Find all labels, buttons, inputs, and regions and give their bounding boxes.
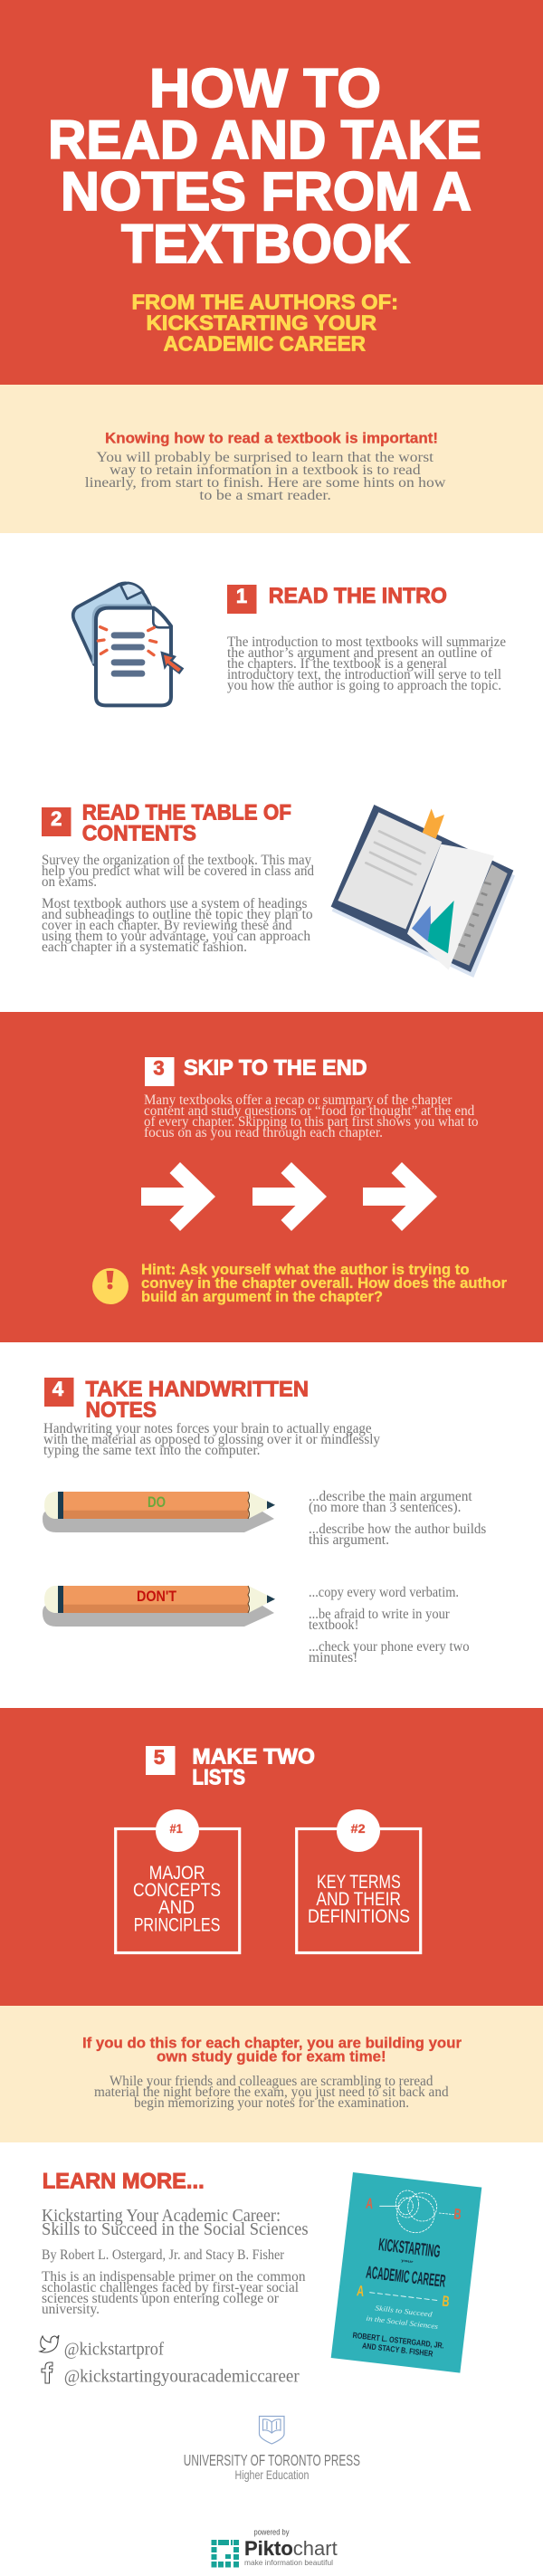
- arrow 1: [141, 1162, 215, 1231]
- text: don't list: ...check your phone every two: [309, 1639, 470, 1655]
- icon: shield with open book: [259, 2417, 284, 2444]
- card: list 2: [297, 1809, 421, 1953]
- arrow 3: [363, 1162, 437, 1231]
- book description: university.: [42, 2302, 100, 2317]
- heading: read the table of contents: CONTENTS: [82, 821, 196, 845]
- book cover: A: [356, 2282, 365, 2300]
- icon: don't pencil: [43, 1586, 275, 1627]
- icon: piktochart mark: [212, 2540, 239, 2567]
- book cover: your: [401, 2258, 414, 2264]
- intro text: way to retain information in a textbook is to read: [110, 463, 421, 478]
- title: READ AND TAKE: [48, 110, 481, 170]
- text: don't list: minutes!: [309, 1650, 357, 1665]
- text: do list: [309, 1489, 486, 1548]
- text: table of contents advice: [42, 853, 314, 955]
- text: intro advice: the chapters. If the textbook is a general: [227, 656, 447, 672]
- facebook handle: @kickstartingyouracademiccareer: [64, 2368, 300, 2387]
- book cover: ACADEMIC CAREER: [365, 2264, 446, 2292]
- text: handwriting advice: with the material as opposed to glossing over it or mindlessly: [43, 1432, 380, 1447]
- text: skip advice: focus on as you read through each chapter.: [144, 1125, 383, 1140]
- book cover: in the Social Sciences: [366, 2314, 439, 2331]
- hint text: [141, 1262, 508, 1305]
- book cover: AND STACY B. FISHER: [362, 2341, 433, 2359]
- card: list 2: DEFINITIONS: [308, 1906, 410, 1927]
- card: list 2: #2: [351, 1821, 366, 1836]
- title: TEXTBOOK: [121, 214, 410, 274]
- panel: step 3 skip to the end: [0, 1012, 543, 1342]
- text: intro advice: The introduction to most textbooks will summarize: [227, 634, 506, 650]
- logo: piktochart: Piktochart: [244, 2537, 338, 2560]
- card: list 2: KEY TERMS: [317, 1872, 401, 1893]
- book cover: A: [365, 2195, 374, 2212]
- text: table of contents advice: each chapter in a systematic fashion.: [42, 940, 247, 955]
- book cover: KICKSTARTING: [377, 2236, 442, 2262]
- card: list 2: AND THEIR: [316, 1889, 401, 1910]
- text: table of contents advice: Survey the organization of the textbook. This may: [42, 853, 311, 868]
- conclusion text: While your friends and colleagues are scrambling to reread: [110, 2074, 433, 2089]
- title: HOW TO: [149, 58, 381, 119]
- panel: step 4 take handwritten notes: [43, 1378, 486, 1665]
- text: handwriting advice: [43, 1421, 380, 1458]
- panel: step 2 read the table of contents: [42, 801, 515, 978]
- text: intro advice: you how the author is going to approach the topic.: [227, 678, 501, 693]
- icon: twitter: [40, 2335, 59, 2352]
- text: don't list: [309, 1585, 470, 1665]
- heading: take handwritten notes: NOTES: [85, 1398, 157, 1423]
- conclusion text: [94, 2074, 449, 2111]
- number badge 4: [44, 1378, 74, 1407]
- conclusion heading: [82, 2034, 462, 2065]
- panel: study guide conclusion: [0, 2006, 543, 2142]
- arrow 2: [252, 1162, 327, 1231]
- text: do list: (no more than 3 sentences).: [309, 1500, 461, 1515]
- book cover: [331, 2172, 481, 2373]
- text: skip advice: of every chapter. Skipping to this part first shows you what to: [144, 1114, 479, 1130]
- heading: take handwritten notes: TAKE HANDWRITTEN: [85, 1378, 309, 1402]
- icon: documents with cursor: [73, 583, 184, 705]
- heading: make two lists: [192, 1744, 315, 1790]
- book description: [42, 2269, 306, 2317]
- panel: title header: [0, 0, 543, 385]
- icon: do pencil: [43, 1492, 275, 1532]
- conclusion heading: If you do this for each chapter, you are building your: [82, 2034, 462, 2051]
- logo: piktochart: make information beautiful: [244, 2558, 333, 2567]
- text: skip advice: content and study questions or “food for thought” at the end: [144, 1103, 475, 1119]
- book description: sciences students upon entering college or: [42, 2291, 280, 2306]
- panel: learn more: [40, 2170, 481, 2387]
- number badge 3: [145, 1057, 174, 1086]
- text: don't list: ...copy every word verbatim.: [309, 1585, 459, 1600]
- text: table of contents advice: Most textbook authors use a system of headings: [42, 896, 308, 911]
- text: don't list: textbook!: [309, 1617, 358, 1633]
- subtitle: FROM THE AUTHORS OF:: [132, 291, 398, 314]
- icon: do pencil: DO: [148, 1493, 166, 1511]
- intro text: to be a smart reader.: [199, 488, 331, 503]
- number badge 3: 3: [153, 1057, 165, 1079]
- intro text: [85, 450, 446, 503]
- logo: university of toronto press: UNIVERSITY OF TORONTO PRESS: [184, 2451, 360, 2469]
- text: skip advice: Many textbooks offer a recap or summary of the chapter: [144, 1092, 452, 1108]
- card: list 1: CONCEPTS: [133, 1880, 221, 1901]
- book cover: ROBERT L. OSTERGARD, JR.: [352, 2331, 444, 2351]
- hint text: convey in the chapter overall. How does the author: [141, 1275, 508, 1292]
- number badge 4: 4: [52, 1378, 64, 1400]
- book title: Kickstarting Your Academic Career:: [42, 2206, 281, 2226]
- subtitle: ACADEMIC CAREER: [164, 332, 366, 356]
- heading: read the table of contents: [82, 801, 291, 845]
- card: list 1: MAJOR: [149, 1863, 205, 1884]
- book description: This is an indispensable primer on the common: [42, 2269, 306, 2285]
- text: do list: ...describe the main argument: [309, 1489, 472, 1504]
- book cover: B: [442, 2293, 451, 2310]
- heading: make two lists: LISTS: [192, 1766, 245, 1790]
- logo: piktochart: powered by: [253, 2528, 290, 2538]
- text: do list: ...describe how the author builds: [309, 1522, 486, 1537]
- number badge 2: [42, 807, 71, 836]
- heading: take handwritten notes: [85, 1378, 309, 1423]
- book title: Skills to Succeed in the Social Sciences: [42, 2219, 309, 2239]
- heading: learn more: LEARN MORE...: [43, 2170, 205, 2194]
- intro text: You will probably be surprised to learn that the worst: [96, 450, 434, 465]
- number badge 1: [227, 585, 257, 614]
- text: table of contents advice: cover in each chapter. By reviewing these and: [42, 918, 292, 933]
- panel: step 5 make two lists: [0, 1708, 543, 2006]
- logo: university of toronto press: [184, 2417, 360, 2482]
- subtitle: [132, 291, 398, 356]
- card: list 1: [116, 1809, 240, 1953]
- intro text: linearly, from start to finish. Here are some hints on how: [85, 475, 446, 491]
- icon: facebook: [42, 2362, 52, 2383]
- text: skip advice: [144, 1092, 479, 1140]
- heading: read the table of contents: READ THE TABLE OF: [82, 801, 291, 825]
- book description: scholastic challenges faced by first-year social: [42, 2280, 299, 2295]
- text: intro advice: [227, 634, 506, 693]
- card: list 1: #1: [170, 1821, 183, 1836]
- card: list 1: AND: [158, 1897, 195, 1918]
- book cover: B: [453, 2205, 462, 2223]
- book cover: Skills to Succeed: [375, 2304, 433, 2319]
- panel: step 1 read the intro: [73, 583, 506, 705]
- logo: piktochart: [212, 2528, 338, 2567]
- intro heading: Knowing how to read a textbook is important!: [105, 429, 438, 447]
- hint text: build an argument in the chapter?: [141, 1289, 383, 1305]
- twitter handle: @kickstartprof: [64, 2341, 164, 2360]
- conclusion heading: own study guide for exam time!: [157, 2047, 386, 2065]
- conclusion text: begin memorizing your notes for the examination.: [134, 2095, 409, 2111]
- icon: open book: [331, 805, 515, 978]
- icon: don't pencil: DON'T: [137, 1588, 177, 1605]
- authors: By Robert L. Ostergard, Jr. and Stacy B. Fisher: [42, 2247, 285, 2263]
- text: table of contents advice: help you predict what will be covered in class and: [42, 863, 314, 879]
- number badge 1: 1: [236, 585, 247, 607]
- hint text: Hint: Ask yourself what the author is trying to: [141, 1262, 470, 1278]
- text: do list: this argument.: [309, 1532, 389, 1548]
- text: table of contents advice: and subheadings to outline the topic they plan to: [42, 907, 313, 922]
- text: handwriting advice: Handwriting your notes forces your brain to actually engage: [43, 1421, 372, 1436]
- number badge 5: [146, 1746, 176, 1775]
- number badge 2: 2: [51, 807, 62, 830]
- title: NOTES FROM A: [61, 161, 472, 222]
- text: intro advice: the author’s argument and present an outline of: [227, 645, 493, 661]
- text: table of contents advice: on exams.: [42, 874, 97, 890]
- number badge 5: 5: [154, 1746, 165, 1769]
- text: intro advice: introductory text, the introduction will serve to tell: [227, 667, 501, 682]
- book title: [42, 2206, 309, 2239]
- icon: exclamation mark: [92, 1268, 129, 1304]
- subtitle: KICKSTARTING YOUR: [147, 311, 376, 335]
- heading: skip to the end: SKIP TO THE END: [184, 1056, 367, 1081]
- conclusion text: material the night before the exam, you just need to sit back and: [94, 2085, 449, 2100]
- text: table of contents advice: using them to your advantage, you can approach: [42, 929, 310, 944]
- title: [48, 58, 481, 274]
- card: list 1: PRINCIPLES: [134, 1914, 220, 1935]
- panel: introduction: [0, 385, 543, 533]
- text: handwriting advice: typing the same text into the computer.: [43, 1443, 261, 1458]
- heading: read the intro: READ THE INTRO: [269, 584, 447, 608]
- text: don't list: ...be afraid to write in your: [309, 1607, 450, 1622]
- heading: make two lists: MAKE TWO: [192, 1744, 315, 1769]
- logo: university of toronto press: Higher Education: [235, 2467, 309, 2482]
